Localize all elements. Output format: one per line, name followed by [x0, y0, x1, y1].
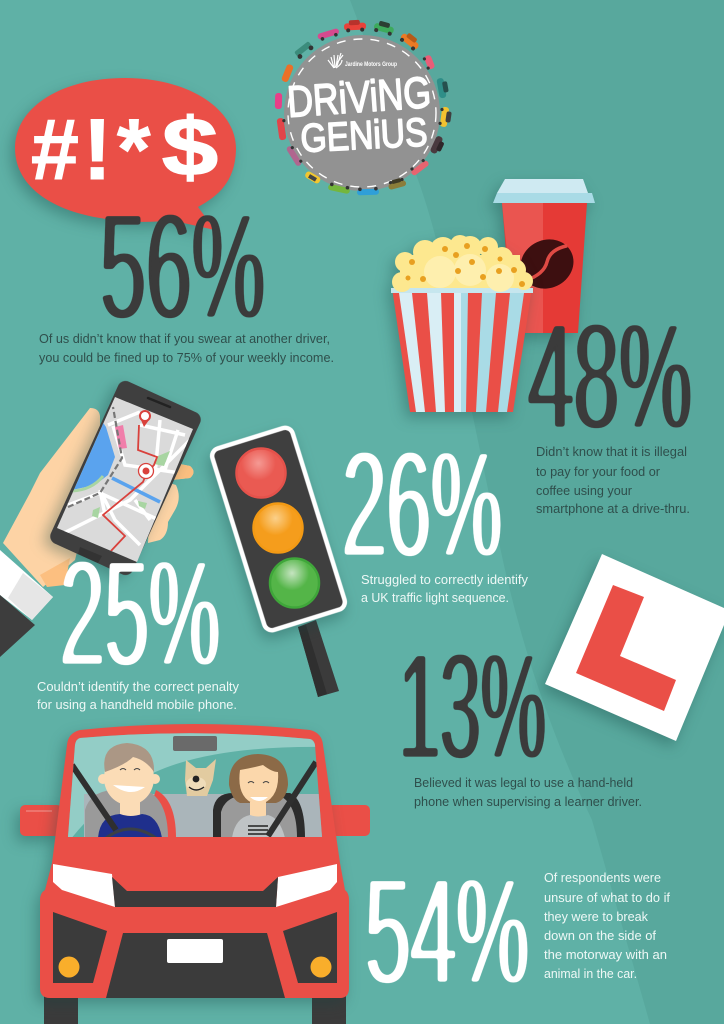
icon: popcorn box [391, 235, 533, 412]
logo: Driving Genius road badge [275, 19, 452, 195]
caption: smartphone at a drive-thru. [536, 502, 690, 516]
speech bubble with swear symbols [15, 78, 236, 230]
stat: 25%: 25% [60, 529, 220, 697]
caption: Of respondents were [544, 871, 661, 885]
headlights [53, 864, 115, 907]
icon: L plate [545, 554, 724, 741]
caption: for using a handheld mobile phone. [37, 698, 237, 712]
caption [37, 680, 240, 712]
caption: down on the side of [544, 929, 657, 943]
housing [210, 426, 347, 632]
caption: unsure of what to do if [544, 891, 671, 905]
icon: traffic light [210, 426, 347, 697]
pole [298, 620, 339, 697]
caption: a UK traffic light sequence. [361, 591, 509, 605]
caption: you could be fined up to 75% of your weekly income. [39, 351, 334, 365]
caption [544, 871, 671, 981]
caption: coffee using your [536, 484, 632, 498]
shirt cuff [0, 550, 53, 620]
stat: 13%: 13% [399, 622, 546, 790]
upper grille [112, 877, 278, 907]
caption: Believed it was legal to use a hand-held [414, 776, 633, 790]
phone [40, 378, 210, 578]
caption: Didn’t know that it is illegal [536, 445, 687, 459]
caption: Struggled to correctly identify [361, 573, 529, 587]
water [74, 423, 115, 490]
red light [236, 448, 286, 498]
stripes [399, 293, 461, 412]
caption: Couldn’t identify the correct penalty [37, 680, 240, 694]
symbols: * [117, 102, 151, 198]
belt [268, 762, 316, 836]
green light [270, 558, 319, 608]
symbols: $ [162, 102, 218, 193]
hand palm [3, 408, 100, 587]
brand name: Jardine Motors Group [345, 61, 397, 68]
caption: they were to break [544, 910, 649, 924]
number plate [167, 939, 223, 963]
back fingers [148, 462, 194, 543]
lid [497, 179, 588, 193]
caption [414, 776, 642, 809]
icon: hand holding phone [0, 378, 210, 657]
home button [78, 547, 102, 563]
logo title [286, 68, 433, 161]
body [40, 724, 349, 998]
windscreen with people [68, 733, 322, 837]
stat: 26% [342, 420, 529, 605]
pink block [115, 425, 127, 449]
caption: animal in the car. [544, 967, 637, 981]
symbols: # [31, 102, 79, 198]
speaker [148, 398, 170, 407]
amber light [254, 504, 302, 552]
logo title: GENiUS [299, 110, 429, 161]
route [103, 425, 157, 552]
icon: coffee cup [493, 179, 595, 333]
stat: 56% [39, 182, 334, 365]
tyres [44, 995, 78, 1024]
side vents [53, 912, 107, 983]
seats [84, 794, 324, 839]
map screen [57, 397, 193, 562]
destination pin [140, 411, 150, 421]
logo title: DRiViNG [286, 68, 433, 127]
passenger [229, 754, 288, 838]
caption: Of us didn’t know that if you swear at another driver, [39, 332, 330, 346]
icon: thistle [328, 53, 343, 68]
dog [185, 759, 216, 796]
roads [60, 412, 190, 545]
stat: 48% [528, 292, 692, 516]
stat: 26%: 26% [342, 420, 502, 588]
icon: red car with passengers [20, 724, 370, 1024]
mirrors [20, 805, 62, 836]
suit sleeve [0, 595, 35, 657]
caption [536, 445, 690, 516]
lower grille [106, 933, 285, 998]
belt [72, 765, 116, 830]
caption: the motorway with an [544, 948, 667, 962]
blue road [112, 478, 160, 502]
stat: 25% [37, 529, 240, 712]
caption: to pay for your food or [536, 465, 660, 479]
rear-view mirror [173, 736, 217, 751]
stat: 54%: 54% [365, 847, 529, 1015]
driver [98, 743, 162, 838]
coffee bean [512, 231, 582, 297]
steering wheel [106, 829, 156, 838]
stat: 56%: 56% [100, 182, 265, 350]
rail line [68, 407, 122, 507]
fog lights [58, 956, 80, 978]
road circle [284, 35, 440, 191]
ring of cars [275, 19, 452, 195]
current position [138, 464, 154, 478]
caption [39, 332, 334, 365]
caption [361, 573, 529, 605]
popcorn [392, 235, 533, 292]
symbols [31, 102, 218, 198]
caption: phone when supervising a learner driver. [414, 795, 642, 809]
symbols: ! [83, 102, 112, 198]
